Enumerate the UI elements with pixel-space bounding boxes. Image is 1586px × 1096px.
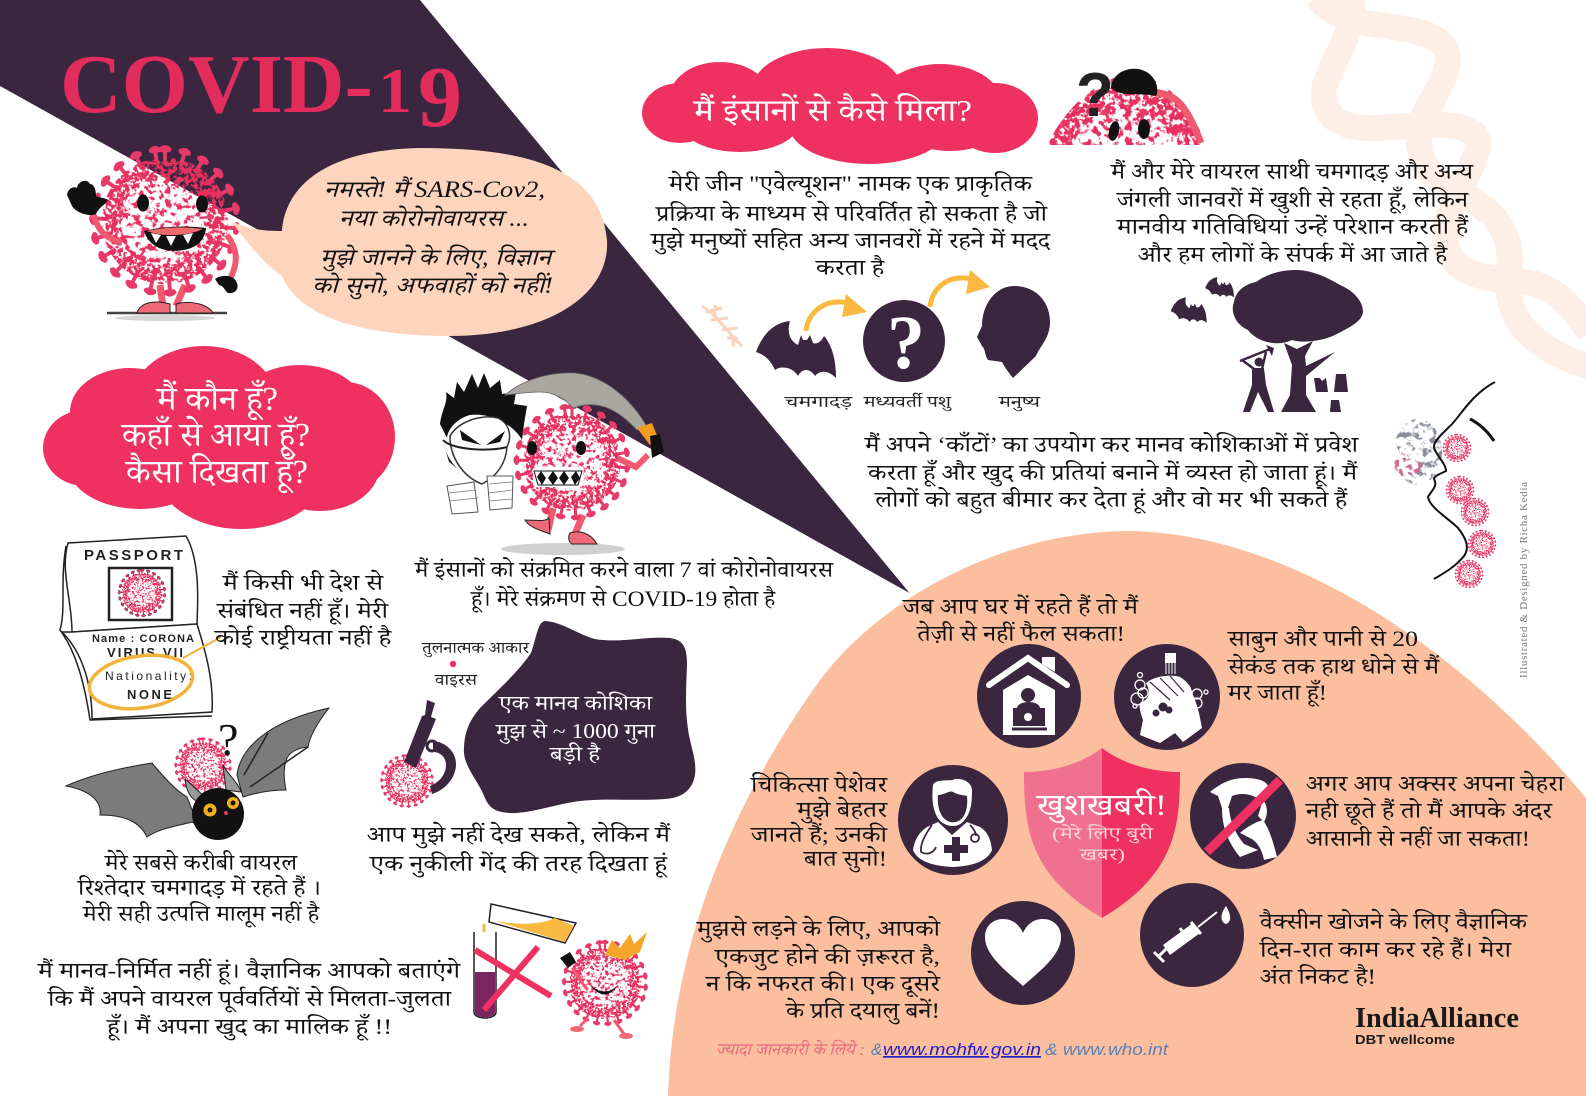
text: wild animals [1110,158,1475,267]
text: spikes: मैं अपने ‘काँटों’ का उपयोग कर मानव कोशिकाओं में प्रवेश [864,431,1359,457]
icon: house [977,644,1081,748]
text: stay home: तेज़ी से नहीं फैल सकता! [916,620,1125,646]
footer links: ज्यादा जानकारी के लिये : [716,1039,865,1059]
text: gene evolution: मेरी जीन "एवेल्यूशन" नामक एक प्राकृतिक [668,170,1034,198]
arrow: intermediate to human [930,270,990,307]
text: unite: न कि नफरत की। एक दूसरे [705,970,942,998]
text: bat relatives: मेरे सबसे करीबी वायरल [104,849,299,875]
shield text: खबर) [1079,845,1125,864]
text: doctors: बात सुनो! [803,846,887,873]
title: 1 [378,55,412,126]
title: COVID- [60,38,373,131]
diagram labels: मध्यवर्ती पशु [863,392,952,411]
diagram labels [784,392,1041,411]
text: 7th coronavirus [414,556,835,613]
cloud heading: how did I meet humans [642,48,1038,164]
text: gene evolution [650,170,1052,280]
icon: question circle: ? [887,301,925,385]
diagram labels: चमगादड़ [784,394,853,411]
blob text: एक मानव कोशिका [498,691,653,715]
blob text: बड़ी है [549,742,601,766]
icon: syringe [1140,883,1244,987]
text: unite: एकजुट होने की ज़रूरत है, [714,943,940,971]
illustration: passport: Nationality: [105,669,192,683]
icon: human head [977,286,1050,378]
text: wild animals: मानवीय गतिविधियां उन्हें परेशान करती हैं [1116,213,1470,239]
text: gene evolution: प्रक्रिया के माध्यम से परिवर्तित हो सकता है जो [655,200,1049,226]
text: gene evolution: करता है [815,254,886,280]
character: peeking virus: ? [1076,61,1114,130]
text: soap and water: साबुन और पानी से 20 [1227,625,1418,653]
text: gene evolution: मुझे मनुष्यों सहित अन्य जानवरों में रहने में मदद [650,227,1052,255]
cloud heading text: मैं इंसानों से कैसे मिला? [692,93,972,128]
speech bubble text: को सुनो, अफवाहों को नहीं! [312,272,553,300]
text: soap and water [1227,625,1441,707]
icon: heart [971,901,1075,1005]
text: doctors [750,771,889,873]
icon: washing hands [1114,644,1220,750]
text: no nationality: कोई राष्ट्रीयता नहीं है [214,624,393,651]
text: unite [696,915,942,1025]
text: face [1305,770,1566,851]
label: comparative size [421,640,530,689]
text: spikes: करता हूँ और खुद की प्रतियां बनाने में व्यस्त हो जाता हूं। मैं [867,459,1359,487]
text: doctors: जानते हैं; उनकी [750,821,889,847]
text: vaccine: दिन-रात काम कर रहे हैं। मेरा [1259,936,1513,962]
character: waving virus [67,145,241,321]
illustration: passport: Name : CORONA [92,633,194,645]
logo: India Alliance: IndiaAlliance [1355,1003,1519,1034]
character: peeking virus [1048,68,1204,145]
label: comparative size: तुलनात्मक आकार [421,640,530,657]
shield text: खुशखबरी! [1035,788,1167,824]
text: not man made [37,957,462,1041]
cloud heading text: मैं कौन हूँ? [155,379,278,421]
speech bubble text [312,176,556,300]
speech bubble [231,148,607,336]
illustration: tree and bats [1171,270,1363,412]
text: face: अगर आप अक्सर अपना चेहरा [1306,770,1566,796]
footer links: & www.who.int [1045,1040,1169,1059]
peach good news area [668,531,1586,1096]
icon: DNA [702,305,742,347]
label: comparative size: वाइरस [434,672,479,689]
text: bat relatives: मेरी सही उत्पत्ति मालूम नहीं है [82,900,321,928]
text: 7th coronavirus: हूँ। मेरे संक्रमण से COVID-19 होता है [470,585,777,613]
text: soap and water: सेकंड तक हाथ धोने से मैं [1227,653,1441,679]
credit: Illustrated & Designed by Richa Kedia [1518,482,1530,678]
shield text [1035,788,1167,864]
transmission diagram [756,270,1050,411]
text: vaccine: वैक्सीन खोजने के लिए वैज्ञानिक [1259,908,1529,934]
text: doctors: चिकित्सा पेशेवर [750,771,889,797]
footer links [716,1039,1169,1059]
illustration: face sneezing [1394,382,1496,588]
text: spikes [864,431,1359,514]
text: stay home [902,593,1140,646]
illustration: bat with virus [66,708,329,840]
text: not man made: हूँ। मैं अपना खुद का मालिक हूँ !! [106,1013,392,1041]
speech bubble text: नमस्ते! मैं SARS-Cov2, [324,176,545,202]
text: no nationality: संबंधित नहीं हूँ। मेरी [216,597,390,625]
text: soap and water: मर जाता हूँ! [1227,679,1327,707]
text: face: आसानी से नहीं जा सकता! [1306,825,1530,851]
text: face: नही छूते हैं तो मैं आपके अंदर [1305,797,1554,826]
icon: microscope with virus [380,700,456,808]
footer links: www.mohfw.gov.in [883,1040,1041,1059]
text: no nationality [214,569,393,651]
cloud heading text [120,379,310,494]
illustration: passport [60,536,221,720]
cloud heading text: कहाँ से आया हूँ? [120,415,310,457]
text: doctors: मुझे बेहतर [796,796,889,824]
background swirl ribbons [1317,0,1586,367]
text: vaccine: अंत निकट है! [1260,963,1376,989]
text: can't see me [367,821,672,878]
icon: don't touch face [1190,763,1296,869]
text: wild animals: मैं और मेरे वायरल साथी चमगादड़ और अन्य [1110,158,1475,184]
cloud heading text: कैसा दिखता हूँ? [124,452,308,494]
speech bubble text: मुझे जानने के लिए, विज्ञान [320,244,556,272]
text: no nationality: मैं किसी भी देश से [222,569,385,595]
cloud heading: who am I [43,346,395,529]
text: unite: के प्रति दयालु बनें! [785,997,940,1025]
text: bat relatives [77,849,321,928]
illustration: passport: NONE [127,687,172,702]
logo: India Alliance [1355,1003,1519,1047]
illustration: test tubes and crowned virus [474,904,648,1039]
dark wedge background [0,0,910,593]
icon: bat [756,321,836,378]
text: wild animals: और हम लोगों के संपर्क में आ जाते है [1138,241,1449,267]
illustration: passport: VIRUS VII [107,645,183,660]
text: 7th coronavirus: मैं इंसानों को संक्रमित करने वाला 7 वां कोरोनोवायरस [414,556,835,582]
diagram labels: मनुष्य [998,394,1041,411]
text: wild animals: जंगली जानवरों में खुशी से रहता हूँ, लेकिन [1116,186,1470,214]
shield text: (मेरे लिए बुरी [1052,823,1154,844]
footer links: & [871,1040,882,1059]
text: vaccine [1259,908,1529,989]
icon: doctor [898,765,1008,875]
title [60,38,462,145]
title: 9 [418,48,462,145]
icon: question circle [863,300,945,385]
text: spikes: लोगों को बहुत बीमार कर देता हूं और वो मर भी सकते हैं [874,486,1349,514]
logo: India Alliance: DBT wellcome [1355,1032,1455,1047]
blob: human cell [464,621,695,813]
blob text: मुझ से ~ 1000 गुना [495,719,656,745]
blob text [495,691,656,766]
illustration: bat with virus: ? [218,714,238,765]
text: not man made: मैं मानव-निर्मित नहीं हूं। वैज्ञानिक आपको बताएंगे [37,957,462,985]
text: can't see me: एक नुकीली गेंद की तरह दिखता हूं [369,851,669,878]
character: villain with mask [440,373,664,555]
text: bat relatives: रिश्तेदार चमगादड़ में रहते हैं । [77,874,321,900]
illustration: passport: PASSPORT [84,547,183,564]
speech bubble text: नया कोरोनोवायरस ... [339,205,529,231]
text: can't see me: आप मुझे नहीं देख सकते, लेकिन मैं [367,821,672,849]
arrow: bat to intermediate [806,294,867,331]
text: unite: मुझसे लड़ने के लिए, आपको [696,915,942,943]
text: not man made: कि मैं अपने वायरल पूर्ववर्तियों से मिलता-जुलता [47,985,453,1013]
icon: shield [1024,748,1180,918]
text: stay home: जब आप घर में रहते हैं तो मैं [902,593,1140,619]
